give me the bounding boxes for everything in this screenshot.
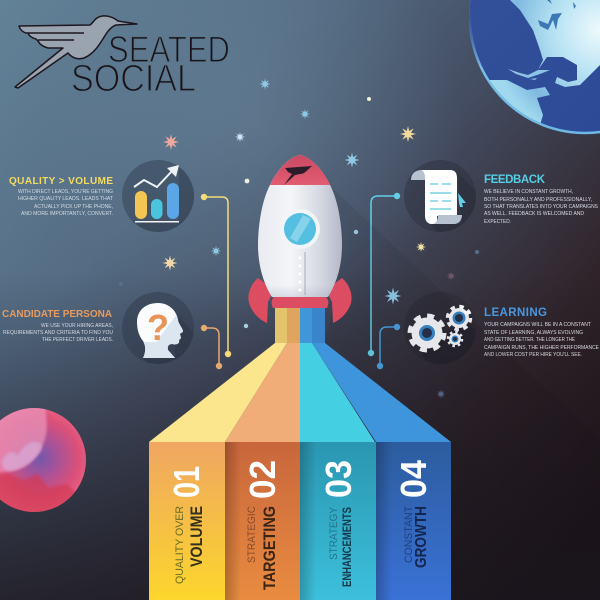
text: feedback: AS WELL. FEEDBACK IS WELCOMED AND — [484, 211, 584, 217]
icon: rising chart — [122, 160, 194, 232]
bar 01: 01 — [166, 466, 207, 498]
text: feedback: EXPECTED. — [484, 219, 511, 225]
text: quality > volume: QUALITY > VOLUME — [9, 176, 113, 187]
text: candidate persona: WE USE YOUR HIRING AREAS, — [41, 323, 113, 329]
connector: learning — [377, 324, 400, 369]
text: learning: YOUR CAMPAIGNS WILL BE IN A CONSTANT — [484, 322, 592, 328]
pale lobes — [2, 442, 42, 471]
text: learning: AND LOWER COST PER HIRE YOU'LL SEE. — [484, 352, 582, 358]
globe — [469, 0, 600, 134]
great lakes — [538, 0, 576, 30]
bar 02: 02 — [242, 460, 283, 499]
engine base — [272, 297, 328, 308]
text: quality > volume — [9, 176, 114, 217]
seam and rivets — [298, 252, 305, 295]
text: candidate persona: THE PERFECT DRIVER LEADS. — [42, 337, 113, 343]
rocket shadow — [325, 183, 600, 600]
bar 02: TARGETING — [261, 506, 279, 590]
bar 04 — [376, 442, 451, 600]
bar 04: CONSTANT — [403, 506, 415, 563]
logo wordmark: SEATED — [108, 29, 230, 70]
nose cone — [270, 155, 330, 185]
red land — [0, 473, 76, 512]
hull shading — [262, 270, 338, 297]
rocket — [248, 155, 352, 323]
connector: feedback — [368, 193, 400, 356]
connector: persona — [201, 325, 222, 369]
text: feedback: FEEDBACK — [484, 174, 546, 186]
large gear — [410, 316, 444, 350]
icon: gears — [408, 304, 476, 364]
icon: head with question mark — [122, 292, 194, 364]
text: learning — [484, 307, 599, 358]
bar 02: STRATEGIC — [246, 506, 258, 563]
text: feedback: WE BELIEVE IN CONSTANT GROWTH, — [484, 189, 573, 195]
text: quality > volume: HIGHER QUALITY LEADS. LEADS THAT — [18, 196, 114, 202]
bar 01: VOLUME — [188, 506, 206, 567]
logo: SOCIAL — [71, 58, 196, 100]
bar 02 — [225, 442, 300, 600]
text: candidate persona — [2, 309, 113, 343]
bar 04: 04 — [393, 460, 434, 498]
medium gear — [448, 306, 470, 330]
text: quality > volume: AND MORE IMPORTANTLY, CONVERT. — [21, 211, 113, 217]
text: learning: LEARNING — [484, 307, 547, 319]
small gear — [448, 332, 462, 346]
text: candidate persona: REQUIREMENTS AND CRITERIA TO FIND YOU — [3, 330, 113, 336]
icon: head with question mark: ? — [147, 307, 169, 348]
ribbon folds — [149, 306, 451, 442]
text: learning: AND GETTING BETTER. THE LONGER THE — [484, 337, 575, 343]
nose bird mark — [284, 166, 312, 185]
text: candidate persona: CANDIDATE PERSONA — [2, 309, 112, 320]
bar 03: 03 — [318, 460, 359, 498]
lit patch — [0, 405, 47, 472]
text: feedback: BOTH PERSONALLY AND PROFESSIONALLY, — [484, 197, 592, 203]
logo — [15, 16, 230, 100]
text: learning: STATE OF LEARNING, ALWAYS EVOLVING — [484, 330, 583, 336]
bar 04: GROWTH — [413, 506, 430, 568]
bar 01: QUALITY OVER — [174, 506, 186, 584]
stars — [119, 78, 479, 398]
oceans — [469, 0, 600, 132]
red planet — [0, 405, 86, 516]
text: feedback — [484, 174, 598, 225]
text: quality > volume: WITH DIRECT LEADS, YOU'RE GETTING — [18, 189, 113, 195]
caribbean islands — [508, 69, 550, 80]
right fin — [326, 278, 352, 323]
left fin — [248, 278, 274, 323]
bar 01 — [149, 442, 225, 600]
bar 03 — [300, 442, 376, 600]
connector: quality — [201, 194, 231, 357]
logo bird — [15, 16, 137, 88]
porthole — [280, 209, 320, 249]
hull — [258, 155, 342, 297]
bar 03: STRATEGY — [328, 506, 340, 560]
bar 03: ENHANCEMENTS — [342, 507, 354, 587]
icon: scroll with cursor — [404, 160, 476, 232]
text: quality > volume: ACTUALLY PICK UP THE PHONE, — [34, 204, 113, 210]
